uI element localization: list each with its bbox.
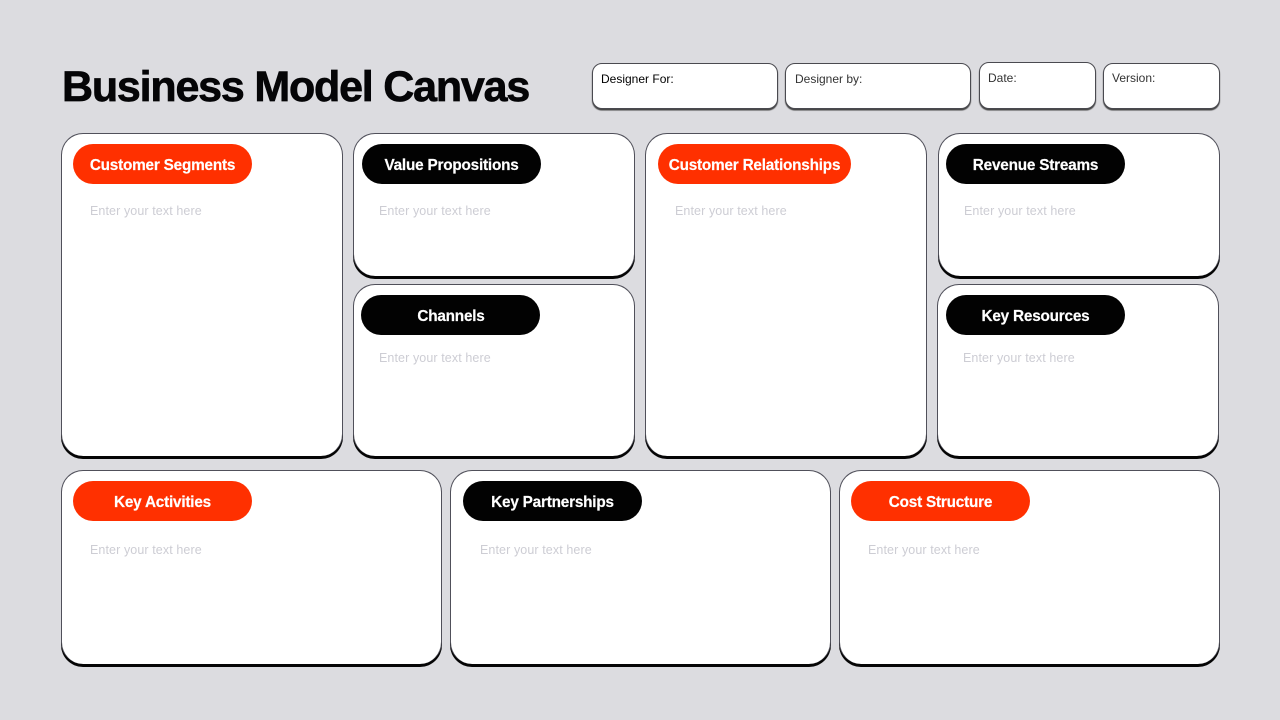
text: cost structure placeholder: Enter your text here: [868, 543, 980, 557]
heading: channels: Channels: [417, 308, 485, 325]
heading: value propositions: [362, 144, 541, 184]
text: key partnerships placeholder: Enter your text here: [480, 543, 592, 557]
heading: key activities: Key Activities: [114, 494, 211, 511]
heading: key resources: [946, 295, 1125, 335]
panel: cost structure: [839, 470, 1220, 664]
field: designer by: Designer by:: [795, 72, 862, 86]
field: version: [1103, 63, 1220, 109]
field: version: Version:: [1112, 71, 1155, 85]
title: Business Model Canvas: [62, 63, 529, 111]
text: key resources placeholder: Enter your text here: [963, 351, 1075, 365]
panel: channels: [353, 284, 635, 456]
text: key activities placeholder: Enter your text here: [90, 543, 202, 557]
heading: cost structure: Cost Structure: [889, 494, 992, 511]
text: customer segments placeholder: Enter your text here: [90, 204, 202, 218]
heading: customer relationships: Customer Relationships: [669, 157, 840, 174]
field: designer by: [785, 63, 971, 109]
panel: key resources: [937, 284, 1219, 456]
field: date: Date:: [988, 71, 1017, 85]
heading: cost structure: [851, 481, 1030, 521]
text: channels placeholder: Enter your text here: [379, 351, 491, 365]
heading: customer segments: [73, 144, 252, 184]
heading: value propositions: Value Propositions: [384, 157, 519, 174]
heading: customer relationships: [658, 144, 851, 184]
heading: key partnerships: Key Partnerships: [491, 494, 614, 511]
heading: key partnerships: [463, 481, 642, 521]
heading: key resources: Key Resources: [982, 308, 1089, 325]
heading: revenue streams: [946, 144, 1125, 184]
heading: customer segments: Customer Segments: [90, 157, 235, 174]
field: designer for: Designer For:: [601, 72, 674, 86]
heading: channels: [361, 295, 540, 335]
panel: customer relationships: [645, 133, 927, 456]
panel: value propositions: [353, 133, 635, 276]
field: date: [979, 62, 1096, 109]
panel: key activities: [61, 470, 442, 664]
text: value propositions placeholder: Enter your text here: [379, 204, 491, 218]
heading: revenue streams: Revenue Streams: [973, 157, 1098, 174]
panel: customer segments: [61, 133, 343, 456]
panel: revenue streams: [938, 133, 1220, 276]
heading: key activities: [73, 481, 252, 521]
text: revenue streams placeholder: Enter your text here: [964, 204, 1076, 218]
panel: key partnerships: [450, 470, 831, 664]
field: designer for: [592, 63, 778, 109]
text: customer relationships placeholder: Enter your text here: [675, 204, 787, 218]
